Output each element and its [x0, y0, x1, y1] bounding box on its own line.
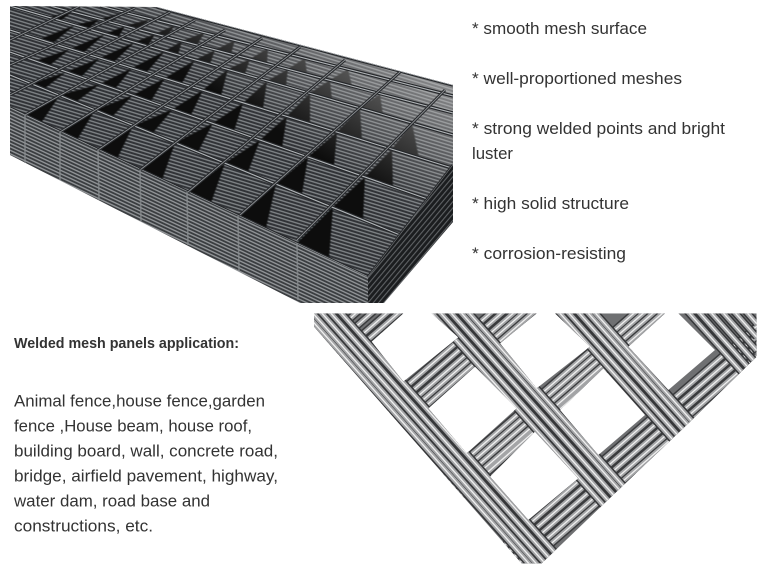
feature: solid structure: * high solid structure — [472, 195, 629, 213]
feature: welded points — [472, 120, 725, 163]
front side of the mesh stack — [10, 108, 368, 303]
vertical cross wires on the front side — [25, 115, 298, 300]
application description: fence ,House beam, house roof, — [14, 418, 252, 436]
application description: bridge, airfield pavement, highway, — [14, 468, 278, 486]
photo: stack of welded mesh panels — [10, 6, 453, 303]
application description — [13, 393, 278, 536]
feature: proportioned meshes: * well-proportioned meshes — [472, 70, 682, 88]
right side of the mesh stack — [368, 165, 453, 303]
application heading: Welded mesh panels application: — [14, 336, 239, 352]
application description: constructions, etc. — [14, 518, 153, 536]
photo: close-up of silver welded mesh corner — [310, 310, 757, 567]
top face of the mesh stack — [10, 6, 453, 278]
feature: welded points: luster — [472, 145, 514, 163]
application description: Animal fence,house fence,garden — [14, 393, 265, 411]
feature: smooth surface: * smooth mesh surface — [472, 20, 647, 38]
feature list — [472, 20, 725, 263]
application description: water dam, road base and — [13, 493, 210, 511]
feature: welded points: * strong welded points and bright — [472, 120, 725, 138]
feature: corrosion resistance: * corrosion-resisting — [472, 245, 626, 263]
application description: building board, wall, concrete road, — [14, 443, 278, 461]
